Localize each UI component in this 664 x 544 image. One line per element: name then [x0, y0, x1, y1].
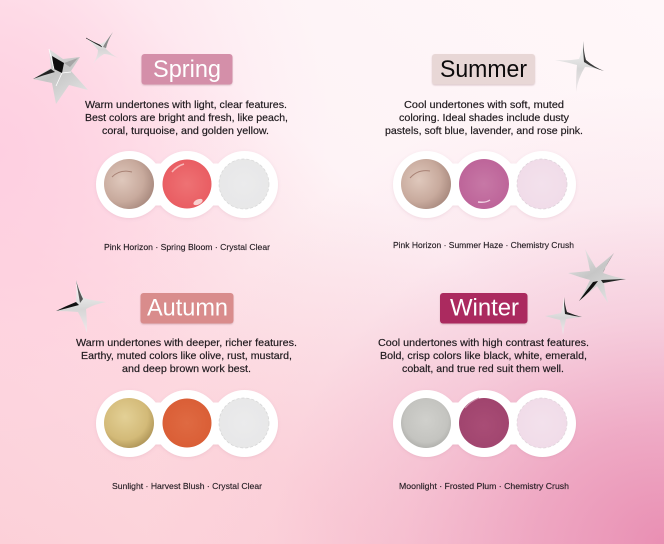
- caption: Summer shades: Pink Horizon · Summer Haze · Chemistry Crush: [393, 240, 574, 250]
- swatch: Chemistry Crush: [517, 398, 567, 448]
- swatch tray: Summer: [393, 151, 576, 218]
- description: Spring: Warm undertones with light, clear features.: [85, 100, 287, 111]
- panel: Autumn: [76, 293, 297, 491]
- description: Autumn: and deep brown work best.: [122, 364, 251, 375]
- swatch tray: Autumn: [96, 390, 278, 457]
- heading: Autumn: Autumn: [147, 294, 228, 322]
- description: Autumn: Earthy, muted colors like olive, rust, mustard,: [81, 351, 292, 362]
- swatch tray: Winter: [393, 390, 576, 457]
- swatch: Summer Haze: [459, 159, 509, 209]
- caption: Autumn shades: Sunlight · Harvest Blush · Crystal Clear: [112, 481, 262, 491]
- panel: Summer: [385, 54, 583, 250]
- swatch: Frosted Plum: [459, 398, 509, 448]
- heading: Winter: Winter: [450, 294, 519, 322]
- icon: chrome sparkle, Summer: [555, 41, 604, 92]
- swatch: Moonlight: [401, 398, 451, 448]
- description: Summer: [385, 100, 583, 137]
- description: Summer: pastels, soft blue, lavender, and rose pink.: [385, 126, 583, 137]
- panel: Spring: [85, 54, 288, 252]
- heading: Spring: Spring: [153, 56, 221, 83]
- caption: Spring shades: Pink Horizon · Spring Bloom · Crystal Clear: [104, 242, 270, 252]
- swatch: Spring Bloom: [162, 160, 212, 208]
- swatch: Chemistry Crush: [517, 159, 567, 209]
- description: Winter: Cool undertones with high contrast features.: [378, 338, 589, 349]
- description: Winter: cobalt, and true red suit them well.: [402, 364, 564, 375]
- icon: small chrome star, Spring: [86, 32, 118, 64]
- description: Spring: coral, turquoise, and golden yellow.: [102, 126, 269, 137]
- swatch: Pink Horizon: [104, 159, 154, 209]
- swatch: Crystal Clear: [219, 159, 269, 209]
- swatch: Harvest Blush: [162, 398, 212, 448]
- icon: small chrome sparkle, Winter: [545, 297, 582, 335]
- caption: Winter shades: Moonlight · Frosted Plum · Chemistry Crush: [399, 481, 569, 491]
- swatch: Sunlight: [104, 398, 154, 448]
- swatch: Pink Horizon: [401, 159, 451, 209]
- description: Spring: [85, 100, 288, 137]
- heading: Spring: [142, 54, 232, 84]
- description: Spring: Best colors are bright and fresh, like peach,: [85, 113, 288, 124]
- panel: Winter: [378, 293, 589, 491]
- heading: Summer: Summer: [440, 56, 527, 83]
- icon: large chrome star, Spring: [33, 49, 88, 104]
- description: Autumn: Warm undertones with deeper, richer features.: [76, 338, 297, 349]
- description: Winter: Bold, crisp colors like black, white, emerald,: [380, 351, 587, 362]
- description: Winter: [378, 338, 589, 375]
- description: Summer: coloring. Ideal shades include dusty: [399, 113, 570, 124]
- swatch: Crystal Clear: [219, 398, 269, 448]
- swatch tray: Spring: [96, 151, 278, 218]
- description: Summer: Cool undertones with soft, muted: [404, 100, 564, 111]
- icon: chrome sparkle, Autumn: [56, 280, 106, 333]
- icon: six-point chrome star, Winter: [568, 249, 626, 303]
- description: Autumn: [76, 338, 297, 375]
